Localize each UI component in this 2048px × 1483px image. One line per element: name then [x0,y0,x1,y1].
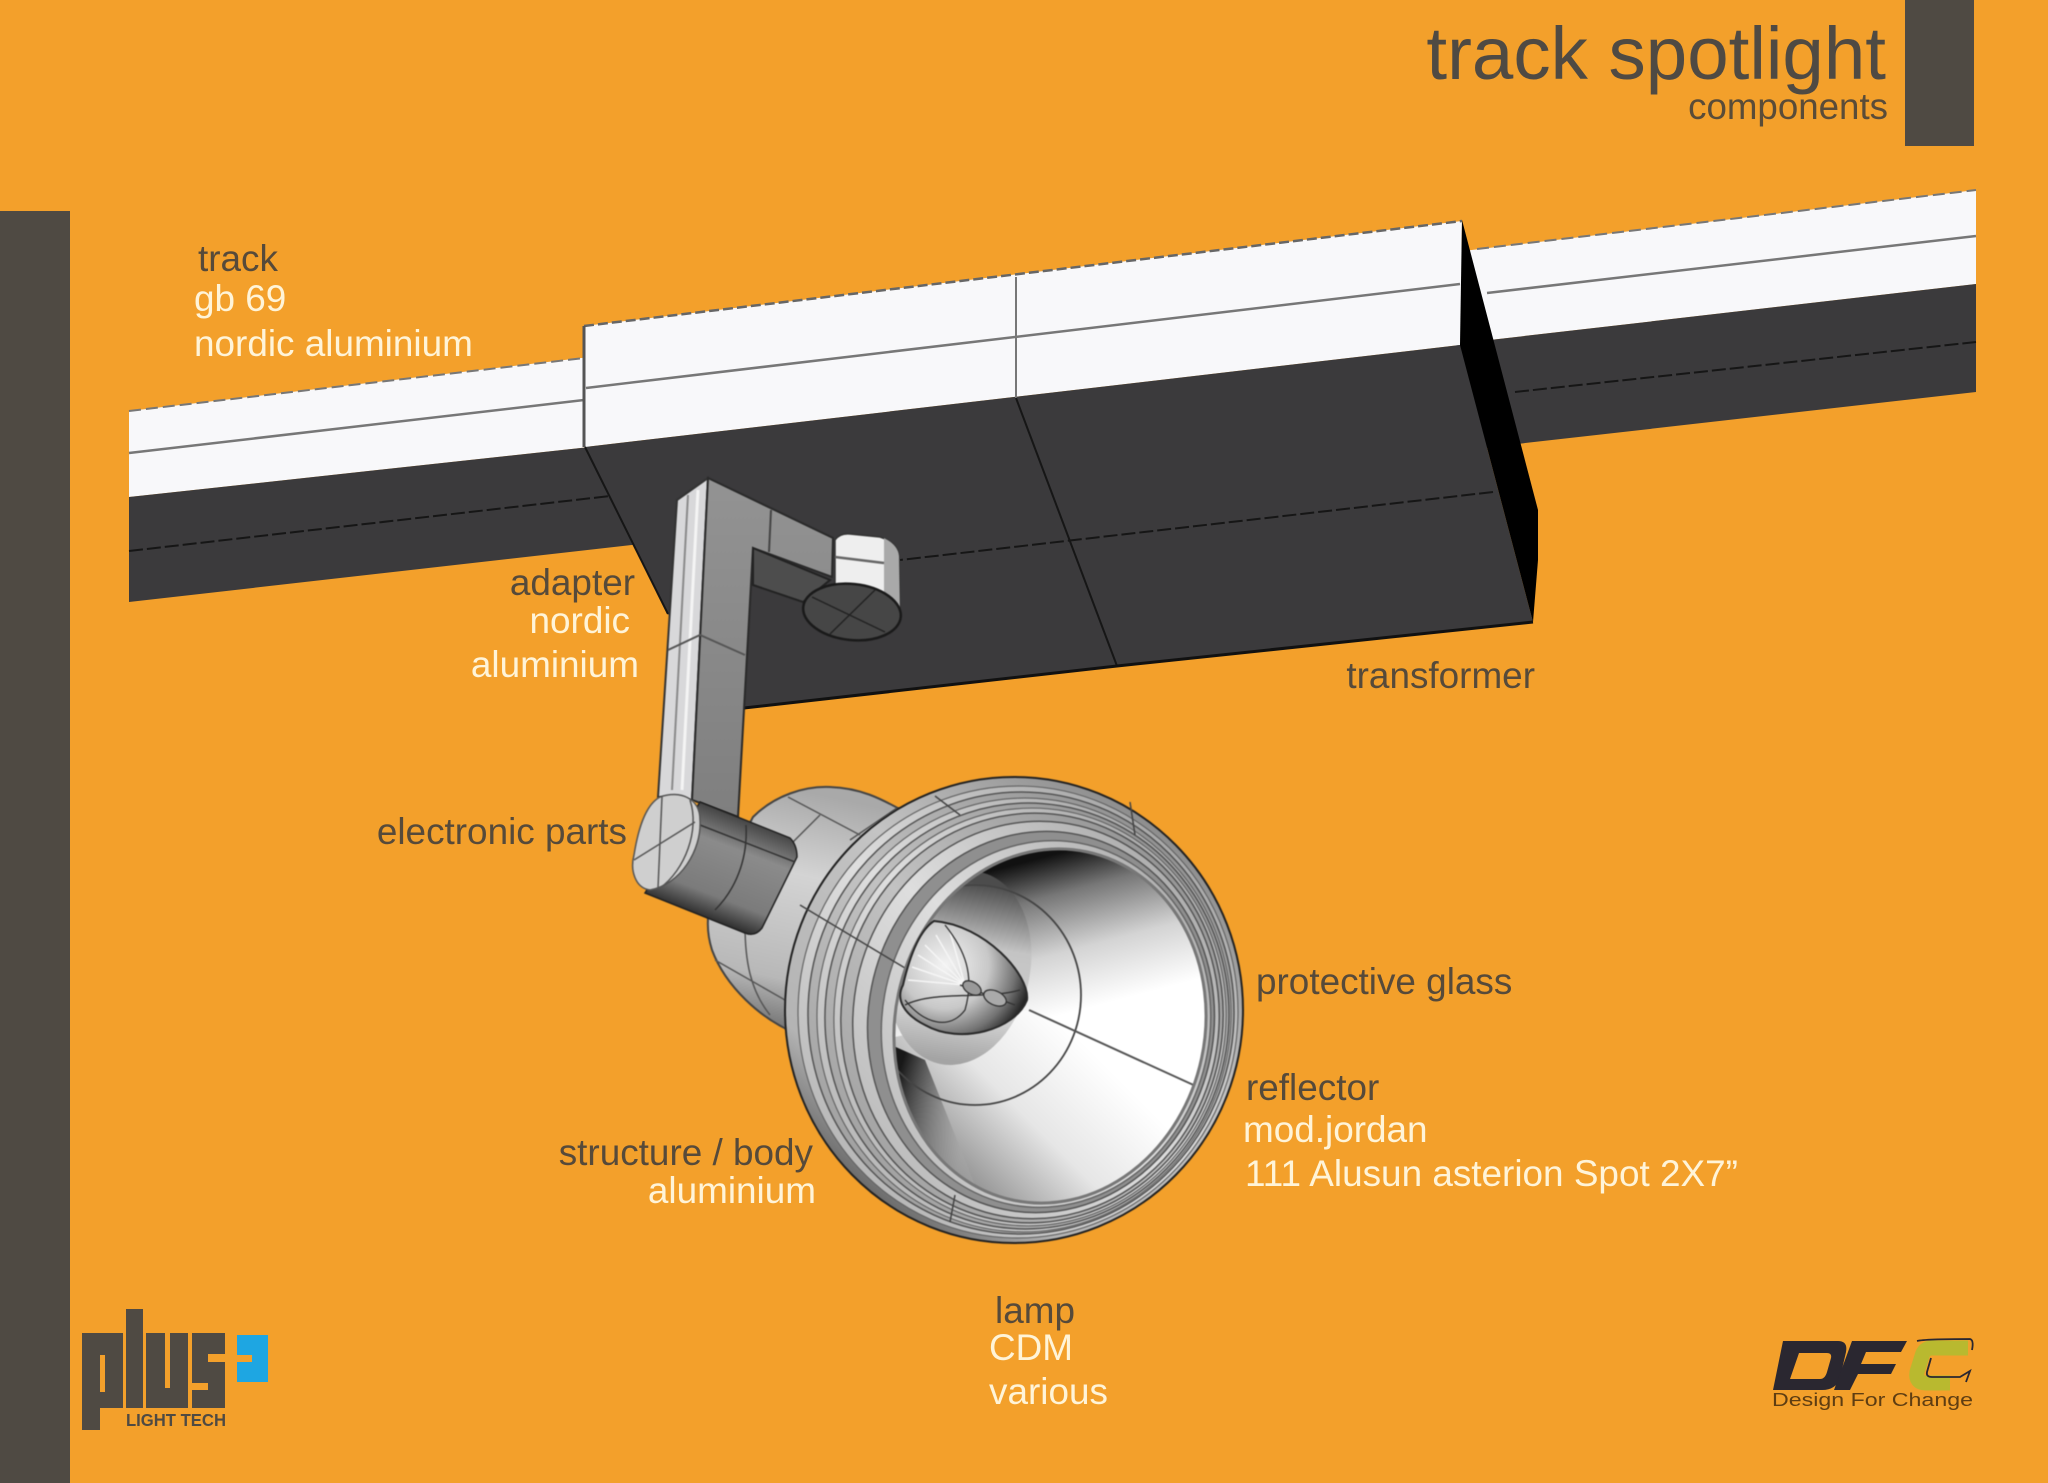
logo: plus light tech [82,1309,268,1430]
label: lamp: various [989,1371,1108,1412]
label: adapter: nordic [530,600,630,641]
label: track: gb 69 [194,278,286,319]
label: reflector: 111 Alusun asterion Spot 2X7” [1245,1153,1738,1194]
label: track: nordic aluminium [194,323,473,364]
reflector interior [895,850,1205,1202]
label: transformer: transformer [1346,655,1535,696]
rim bands [785,777,1244,1244]
lamp knuckle [633,795,797,934]
lamp bulb [900,921,1027,1034]
adapter highlight strip [658,478,708,800]
label: protective glass: protective glass [1256,961,1512,1002]
logo: DFC design for change [1772,1339,1973,1410]
adapter inner band [753,548,830,602]
label: lamp [989,1290,1108,1412]
adapter connector cylinder [800,534,904,645]
label: adapter: aluminium [471,644,639,685]
label: track [194,238,473,364]
logo: DFC design for change: Design For Change [1772,1390,1973,1410]
track left section [129,357,640,602]
knuckle cap [633,795,700,890]
label: track: track [198,238,278,279]
label: structure body: aluminium [648,1170,816,1211]
track rail [129,190,1976,602]
label: reflector [1243,1067,1738,1194]
transformer underside [585,345,1533,708]
lamp back body [708,787,905,1035]
track right section [1455,190,1976,451]
knuckle cylinder [645,802,797,934]
label: lamp: CDM [989,1327,1073,1368]
label: adapter [471,562,639,685]
top corner bar [1905,0,1974,146]
label: structure body: structure / body [559,1132,814,1173]
transformer front white face [584,221,1462,447]
adapter arm [658,478,904,817]
label: adapter: adapter [510,562,635,603]
label: structure body [559,1132,816,1211]
label: electronic parts: electronic parts [377,811,627,852]
subtitle: components [1688,86,1888,127]
lamp head [785,777,1244,1244]
title: track spotlight [1426,12,1886,95]
label: reflector: reflector [1246,1067,1379,1108]
label: lamp: lamp [995,1290,1075,1331]
transformer end face [1460,220,1538,622]
left side bar [0,211,70,1483]
transformer box [584,220,1538,708]
logo: plus light tech: LIGHT TECH [126,1410,226,1430]
adapter gray face [692,478,833,817]
label: reflector: mod.jordan [1243,1109,1428,1150]
